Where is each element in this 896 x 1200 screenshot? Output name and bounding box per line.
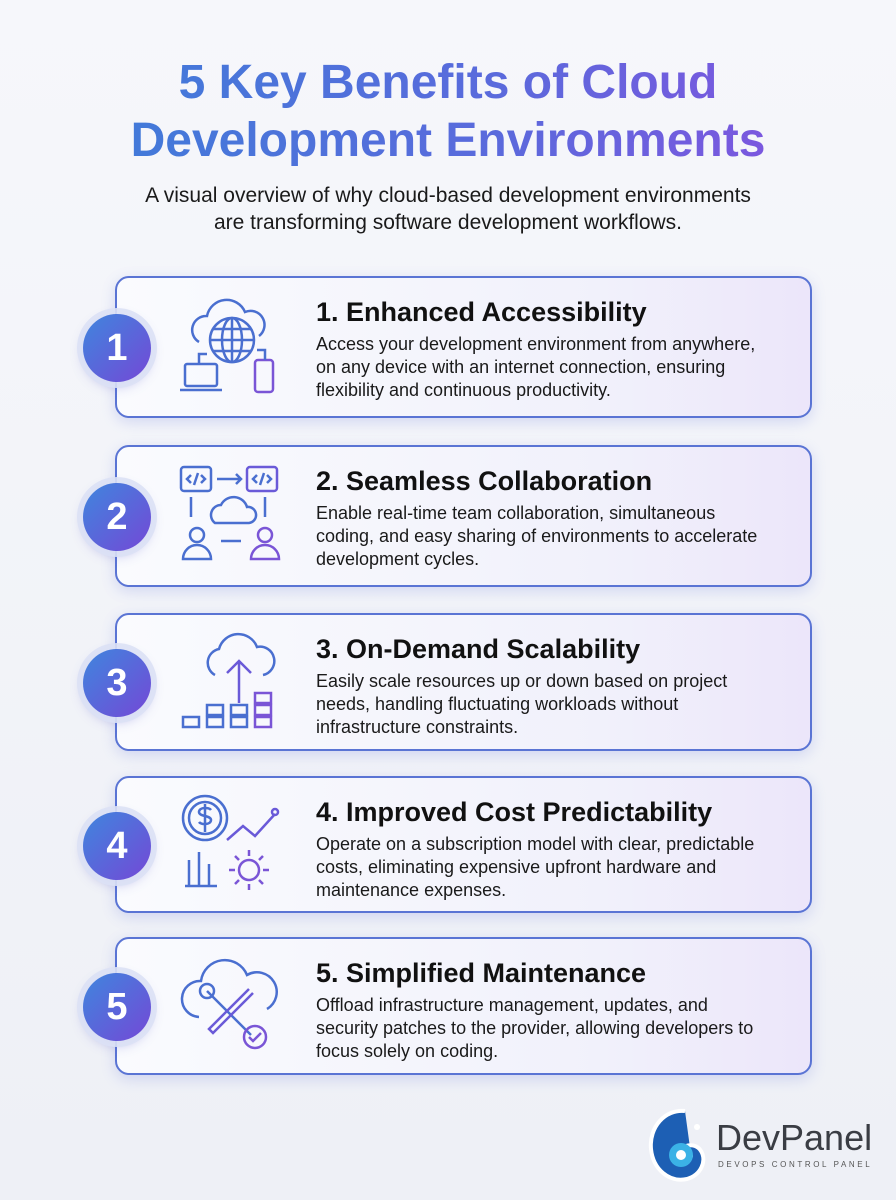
number badge 5 (83, 973, 151, 1041)
subtitle: are transforming software development workflows. (214, 211, 682, 234)
panel: card 2 (115, 445, 812, 587)
text 3: Easily scale resources up or down based on project needs, handling fluctuating workloads without infrastructure constraints. (316, 671, 727, 737)
title (0, 54, 896, 170)
logo: DevPanel (649, 1109, 872, 1182)
subtitle (145, 184, 751, 234)
heading 1: 1. Enhanced Accessibility (316, 297, 647, 327)
text 2: Enable real-time team collaboration, simultaneous coding, and easy sharing of environments to accelerate development cycles. (316, 503, 757, 569)
logo: DevPanel: DEVOPS CONTROL PANEL (718, 1160, 872, 1169)
logo text: DevPanel (716, 1117, 872, 1158)
heading 3: 3. On-Demand Scalability (316, 634, 640, 664)
title: 5 Key Benefits of Cloud (179, 56, 717, 109)
number badge 1 (83, 314, 151, 382)
panel: card 1 (115, 276, 812, 418)
number badge 1: 1 (106, 327, 128, 369)
number badge 4 (83, 812, 151, 880)
panel: card 5 (115, 937, 812, 1075)
icon: cost (182, 794, 280, 890)
icon: chameleon (649, 1109, 706, 1182)
number badge 4: 4 (106, 825, 128, 867)
text 5: Offload infrastructure management, updates, and security patches to the provider, allowing developers to focus solely on coding. (316, 995, 753, 1061)
title: Development Environments (131, 114, 765, 167)
number badge 3: 3 (106, 662, 128, 704)
icon: cloud globe devices (180, 298, 274, 394)
heading 5: 5. Simplified Maintenance (316, 958, 646, 988)
icon: maintenance (180, 958, 278, 1050)
text 4: Operate on a subscription model with clear, predictable costs, eliminating expensive upfront hardware and maintenance expenses. (316, 834, 754, 900)
heading 4: 4. Improved Cost Predictability (316, 797, 712, 827)
heading 2: 2. Seamless Collaboration (316, 466, 652, 496)
text 1: Access your development environment from anywhere, on any device with an internet connection, ensuring flexibility and continuous productivity. (316, 334, 755, 400)
icon: collaboration (180, 466, 280, 560)
number badge 5: 5 (106, 986, 128, 1028)
panel: card 4 (115, 776, 812, 913)
icon: scaling (182, 632, 276, 728)
number badge 3 (83, 649, 151, 717)
number badge 2 (83, 483, 151, 551)
panel: card 3 (115, 613, 812, 751)
subtitle: A visual overview of why cloud-based development environments (145, 184, 751, 207)
number badge 2: 2 (106, 496, 128, 538)
